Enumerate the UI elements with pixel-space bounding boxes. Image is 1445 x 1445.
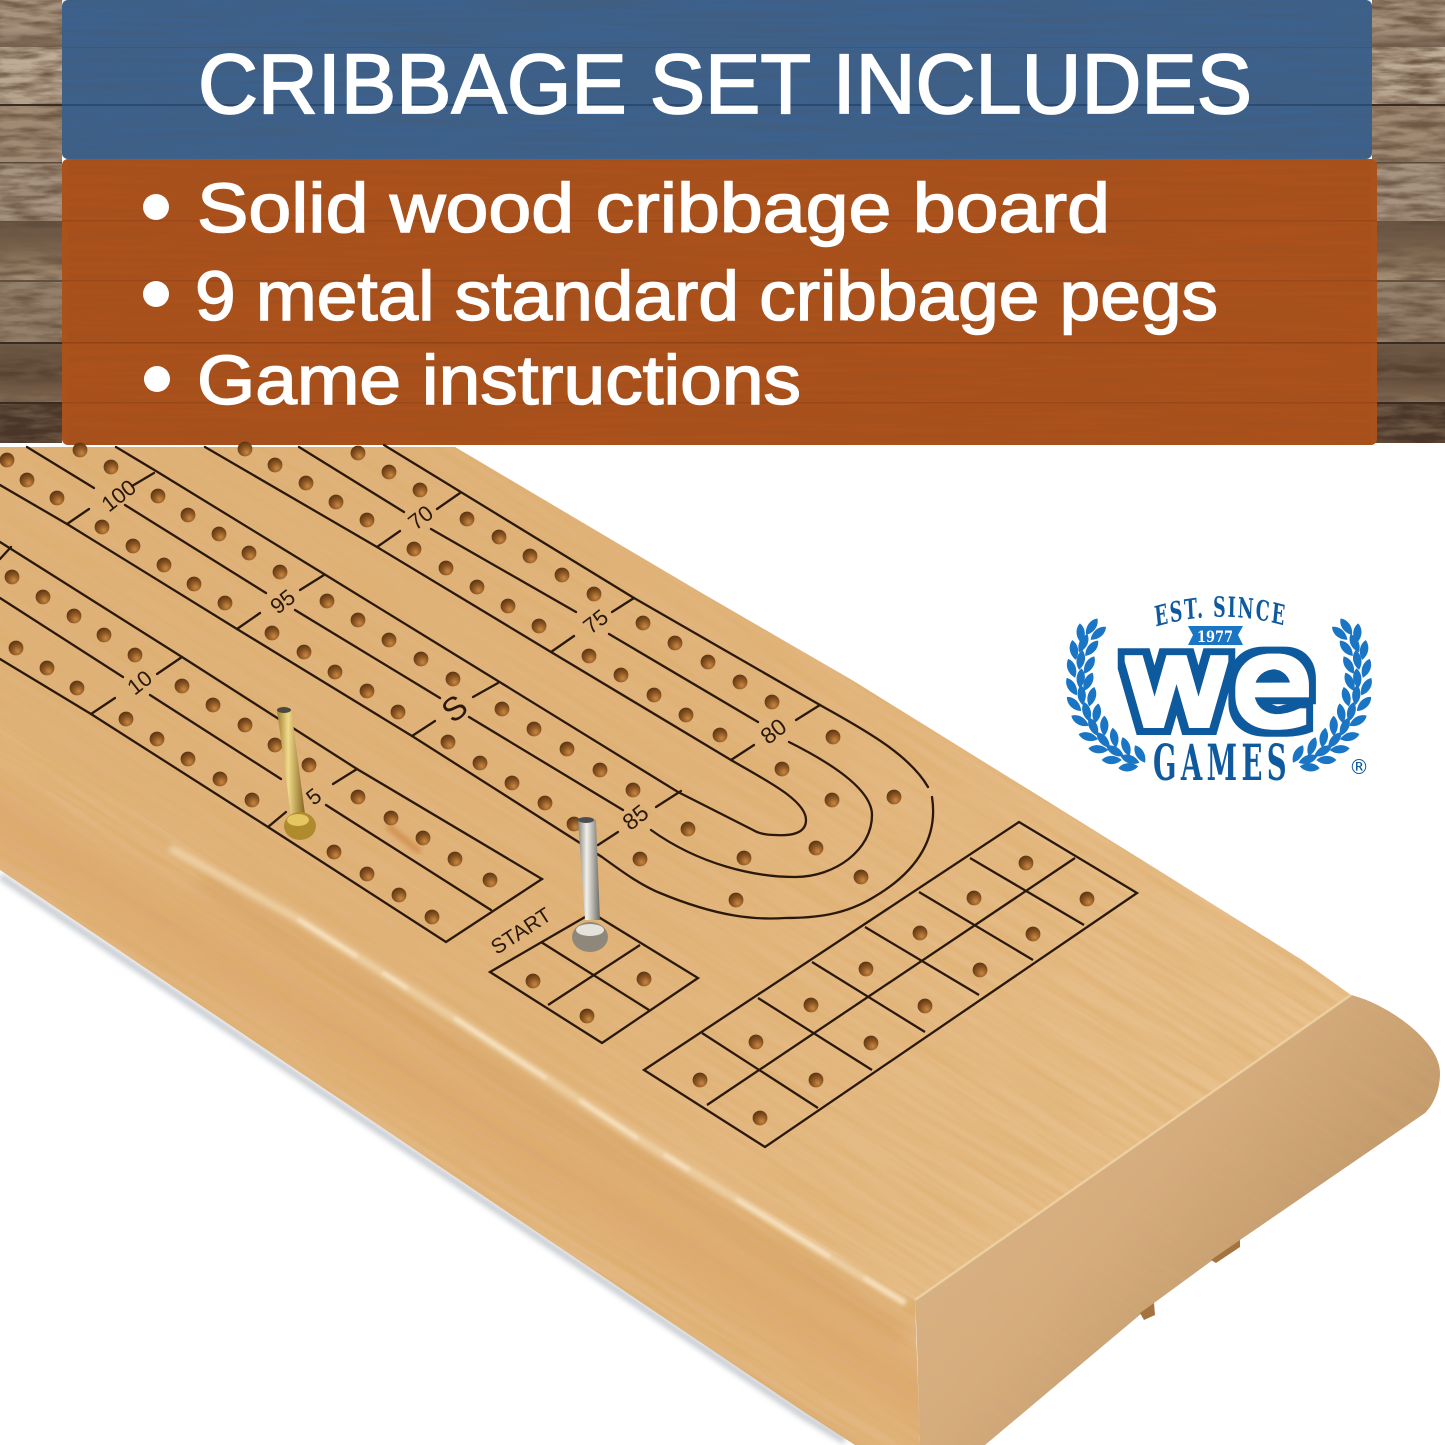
games wordmark: GAMES (1153, 733, 1291, 792)
list item: game instructions: Game instructions (197, 341, 801, 419)
track labels: 100 (97, 474, 141, 517)
track labels: S (434, 687, 474, 730)
list item: solid wood cribbage board: Solid wood cribbage board (197, 169, 1110, 247)
resin streak (388, 826, 420, 852)
1977 ribbon: 1977 (1197, 627, 1233, 646)
peg holes (0, 442, 1094, 1125)
registered mark: ® (1349, 755, 1369, 779)
brass peg (277, 707, 316, 840)
laurel left (1063, 616, 1149, 772)
board drop shadow (0, 876, 845, 1441)
long side extra grain (0, 724, 920, 1445)
est since arc text: EST. SINCE (1154, 596, 1285, 626)
list item: metal pegs: 9 metal standard cribbage pegs (195, 257, 1218, 335)
track labels: 85 (617, 799, 653, 835)
upper track lines (0, 445, 933, 919)
cribbage board photo illustration (0, 442, 1440, 1445)
board end face (915, 995, 1440, 1445)
panel: blue title banner (62, 0, 1372, 159)
track labels: 95 (265, 584, 300, 619)
track labels: 5 (301, 783, 326, 810)
wooden plank background, left strip (0, 0, 62, 443)
board top face (0, 447, 1351, 1300)
board long side (0, 724, 920, 1445)
laurel right (1289, 616, 1375, 772)
track labels: START (487, 903, 556, 959)
track labels: 70 (403, 500, 438, 535)
we wordmark: we (1122, 612, 1313, 754)
track labels: 80 (755, 713, 791, 749)
start box (490, 913, 698, 1043)
score grid (644, 822, 1137, 1147)
edge highlight (170, 848, 905, 1303)
wooden plank background, right strip (1372, 0, 1445, 443)
underside notches (1140, 1240, 1240, 1320)
panel: orange contents list (62, 159, 1377, 445)
track labels (97, 474, 791, 959)
track labels: 10 (122, 665, 157, 700)
logo: WE Games (1066, 596, 1372, 792)
wood grain texture (0, 447, 1351, 1445)
silver peg (572, 817, 608, 952)
end face texture (915, 995, 1440, 1445)
track labels: 75 (578, 604, 613, 639)
end face ridge (915, 995, 1351, 1300)
lower track lines (0, 542, 542, 942)
edge glints (298, 919, 905, 1303)
title: CRIBBAGE SET INCLUDES (198, 37, 1252, 131)
warm band below ridge (200, 880, 905, 1335)
